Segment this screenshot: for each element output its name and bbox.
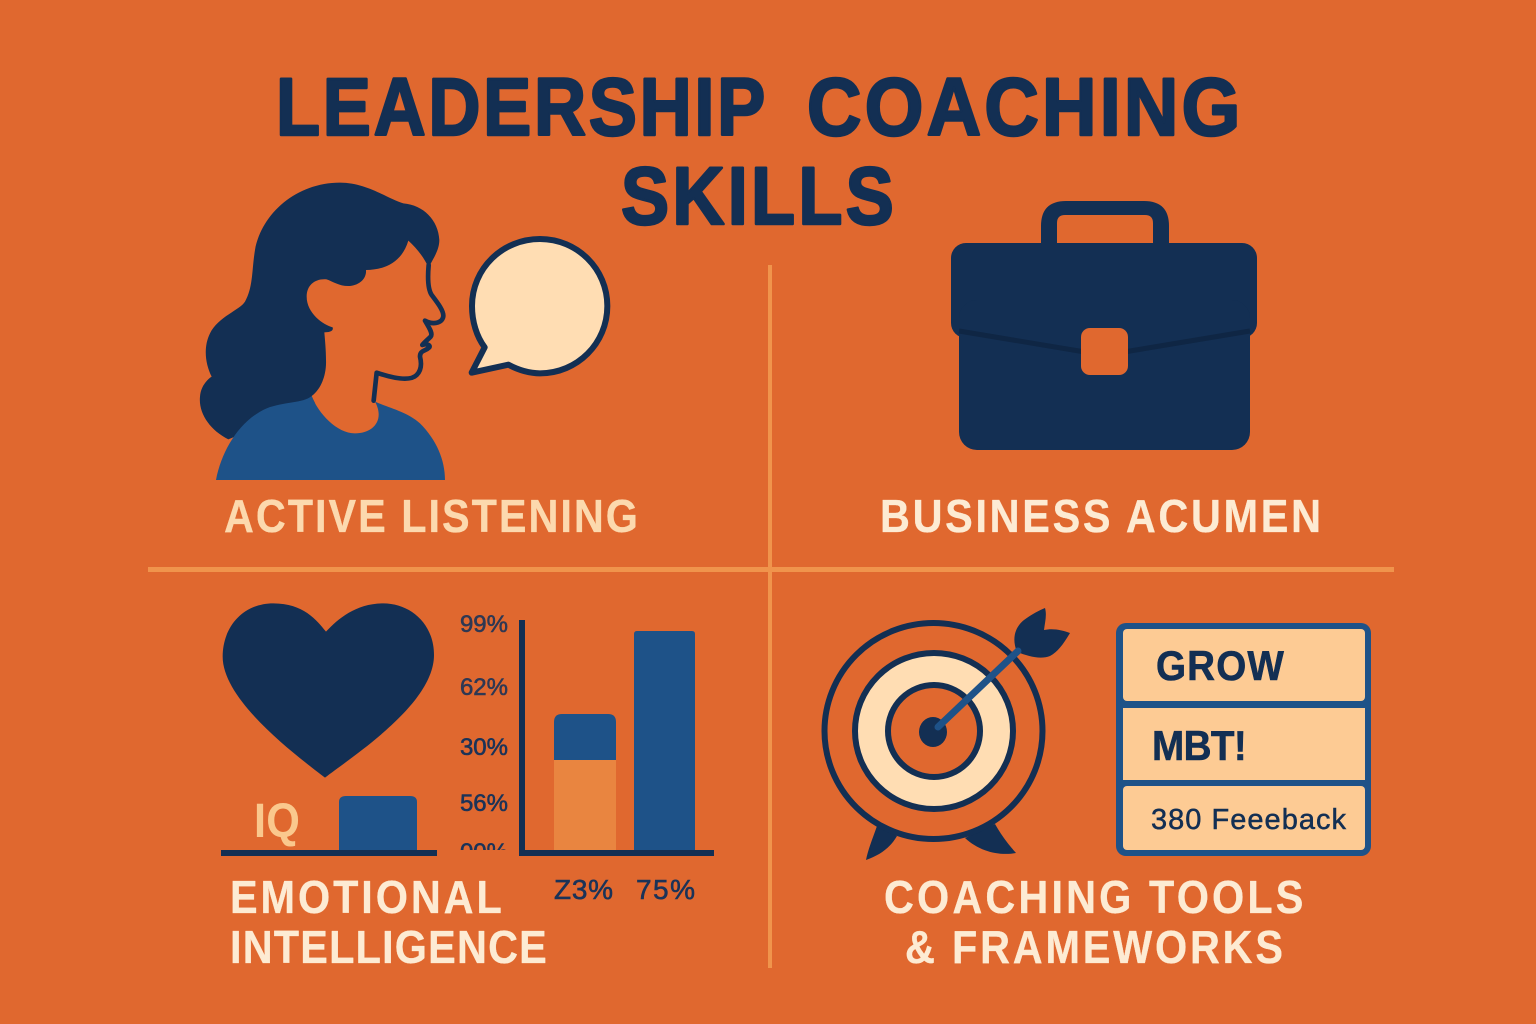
label: coaching tools and frameworks: & FRAMEWORKS xyxy=(905,922,1283,974)
icon: target with arrow xyxy=(824,608,1070,860)
IQ mini chart: IQ xyxy=(254,794,300,848)
label: business acumen: BUSINESS ACUMEN xyxy=(880,491,1321,543)
bar chart: 62% xyxy=(460,674,508,701)
label: emotional intelligence xyxy=(230,872,547,974)
frameworks table xyxy=(1116,623,1371,856)
label: coaching tools and frameworks xyxy=(884,872,1303,974)
title: COACHING xyxy=(807,61,1240,153)
cell: GROW xyxy=(1123,629,1365,701)
bar chart: Z3% xyxy=(554,874,613,905)
cell: GROW: GROW xyxy=(1156,641,1285,689)
icon: speech bubble xyxy=(472,239,607,373)
panel: coaching tools and frameworks xyxy=(824,608,1371,974)
panel: emotional intelligence xyxy=(221,603,714,974)
cell: MBTI: MBT! xyxy=(1152,721,1247,769)
bar chart: 00% xyxy=(460,839,508,866)
panel: active listening xyxy=(200,183,638,543)
icon: heart xyxy=(223,603,434,778)
cell: feedback xyxy=(1123,786,1365,850)
bar chart: 99% xyxy=(460,611,508,638)
label: active listening: ACTIVE LISTENING xyxy=(224,491,638,543)
cell: MBTI xyxy=(1123,708,1365,780)
IQ mini chart xyxy=(221,794,437,856)
bar chart: 75% xyxy=(636,874,695,905)
title xyxy=(276,61,1240,242)
panel: business acumen xyxy=(880,201,1321,543)
icon: briefcase xyxy=(951,201,1257,450)
bar chart: 30% xyxy=(460,734,508,761)
label: emotional intelligence: INTELLIGENCE xyxy=(230,922,547,974)
label: coaching tools and frameworks: COACHING TOOLS xyxy=(884,872,1303,924)
bar chart xyxy=(460,611,714,905)
icon: woman in profile xyxy=(200,183,607,480)
title: LEADERSHIP xyxy=(276,62,765,153)
title: SKILLS xyxy=(621,151,894,242)
cell: feedback: 380 Feeeback xyxy=(1151,804,1346,836)
bar chart: 56% xyxy=(460,790,508,817)
label: emotional intelligence: EMOTIONAL xyxy=(230,872,502,924)
